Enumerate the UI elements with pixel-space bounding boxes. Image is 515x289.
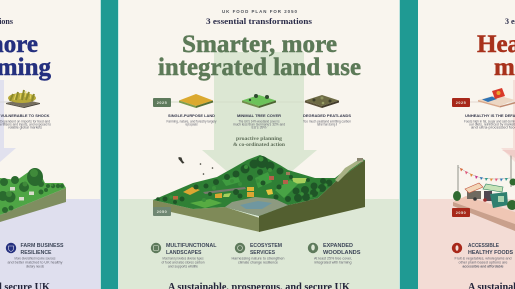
panel: left farming [0, 17, 66, 289]
subtitle: 3 essential transformations [206, 17, 312, 26]
text: resilience description: dietary needs [26, 264, 44, 268]
arrow: right panel [501, 80, 515, 162]
icon: degraded peatlands tile [305, 95, 339, 108]
column: degraded peatlands [303, 113, 351, 126]
lime meadows [190, 199, 222, 208]
right title [477, 31, 515, 81]
heading: multifunctional landscapes: LANDSCAPES [166, 250, 202, 256]
text: vulnerable description: volatile global markets [8, 126, 42, 130]
panel: centre land use [151, 9, 365, 289]
heading: farm business resilience [20, 243, 64, 256]
column: minimal tree cover: MINIMAL TREE COVER [237, 113, 281, 118]
pond and shore [225, 197, 288, 216]
top surface [153, 155, 365, 216]
icon: shield [6, 243, 16, 253]
column: degraded peatlands: DEGRADED PEATLANDS [303, 113, 351, 118]
text: ecosystem description: Harnessing nature to strengthen [232, 256, 285, 260]
icon: ecosystem services [235, 243, 245, 253]
illustration: 2050 integrated landscape [153, 155, 365, 232]
illustration: diversified farm landscape [0, 168, 66, 222]
column: minimal tree cover [233, 113, 285, 130]
right face [259, 160, 365, 232]
text: accessible description: accessible and affordable [462, 264, 504, 268]
buildings [173, 196, 178, 200]
heading: expanded woodlands: WOODLANDS [323, 250, 361, 256]
arrow: centre panel [202, 52, 317, 199]
text: multifunctional description: and supports wildlife [168, 264, 198, 268]
text: accessible description: other plant-based options are [458, 260, 508, 264]
text: proactive planning: & co-ordinated action [233, 142, 286, 148]
heading: vulnerable to shock: VULNERABLE TO SHOCK [0, 113, 50, 118]
trees mid [169, 156, 328, 202]
left title [0, 31, 51, 81]
icon: birds [178, 157, 213, 175]
text: resilience description [8, 256, 63, 268]
text: resilience description: and better matched to UK healthy [8, 260, 63, 264]
icon: minimal tree cover tile [242, 94, 276, 108]
heading: multifunctional landscapes: MULTIFUNCTIONAL [166, 243, 217, 249]
text: woodlands description: At least 25% tree cover, [314, 256, 352, 260]
left face [153, 200, 260, 232]
column: minimal tree cover: The UK's 14% woodland cover is [238, 120, 280, 124]
2050 badge: 2050 [456, 211, 466, 215]
heading: accessible healthy foods [468, 243, 513, 256]
text: multifunctional description [162, 256, 205, 268]
column: degraded peatlands: Too much peatland emitting carbon [303, 120, 351, 124]
2025 timeline [153, 98, 320, 107]
text: vulnerable description [0, 120, 51, 130]
road and fields [203, 187, 246, 194]
icon: expanded woodlands [308, 243, 318, 253]
text: vulnerable description: Dependent on imports for feed and [0, 120, 50, 124]
text: unhealthy description: and ultra-processed foods [471, 126, 515, 130]
text: unhealthy description [464, 120, 515, 130]
title: Smarter, more [182, 31, 337, 58]
icon: accessible foods [452, 243, 462, 253]
text: vulnerable description: fertilisers and inputs, and exposed to [0, 122, 51, 126]
text: woodlands description [314, 256, 352, 264]
icon: shopping tile with snack packet [478, 88, 515, 108]
2025 badge [452, 98, 515, 107]
icon: multifunctional landscapes [151, 243, 161, 253]
heading: expanded woodlands [323, 243, 361, 256]
illustration: food market [453, 150, 515, 231]
text: accessible description [454, 256, 512, 268]
heading: farm business resilience: RESILIENCE [20, 250, 52, 256]
column: single-purpose land: Farming, nature, and forestry largely [166, 120, 217, 124]
text: resilience description: More diversified income sources [14, 256, 56, 260]
text: ecosystem description [232, 256, 285, 264]
heading: expanded woodlands: EXPANDED [323, 243, 353, 249]
column: single-purpose land [166, 113, 217, 126]
text: ecosystem description: climate change resilience [238, 260, 278, 264]
column: minimal tree cover: much less than Germany's 32% and [233, 122, 285, 126]
text: woodlands description: integrated with farming [314, 260, 352, 264]
2025 timeline: 2025 [157, 101, 167, 105]
text: proactive planning [233, 136, 286, 148]
heading: accessible healthy foods: ACCESSIBLE [468, 243, 499, 249]
heading: accessible healthy foods: HEALTHY FOODS [468, 250, 513, 256]
heading: farm business resilience: FARM BUSINESS [20, 243, 64, 249]
pale upland [335, 160, 364, 182]
heading: ecosystem services [250, 243, 282, 256]
text: unhealthy description: our diets, reinforced by marketing [469, 122, 515, 126]
left 2025 line [0, 101, 10, 103]
column: single-purpose land: SINGLE-PURPOSE LAND [168, 113, 215, 118]
text: multifunctional description: Most land provides diverse types [162, 256, 204, 260]
heading: ecosystem services: ECOSYSTEM [250, 243, 282, 249]
title [158, 31, 361, 81]
column: degraded peatlands: rather than storing it [317, 122, 337, 126]
text: accessible description: Fruit & vegetables, wholegrains and [454, 256, 512, 260]
icon: single-purpose land tile [179, 94, 213, 108]
2025 badge: 2025 [456, 101, 466, 105]
2050 badge [153, 207, 171, 216]
icon: vulnerable crop tile [6, 90, 40, 108]
heading: multifunctional landscapes [166, 243, 217, 256]
trees dark [156, 156, 332, 204]
arrow: left panel [0, 80, 16, 162]
text: multifunctional description: of food and also stores carbon [162, 260, 205, 264]
column: single-purpose land: kept separated [186, 122, 198, 126]
2050 badge: 2050 [157, 210, 167, 214]
heading: ecosystem services: SERVICES [250, 250, 275, 256]
text: proactive planning: proactive planning [236, 136, 282, 142]
column: minimal tree cover: EU's 39% [252, 126, 267, 130]
panel: right healthy food [452, 17, 515, 289]
title: integrated land use [158, 54, 361, 81]
eyebrow: UK FOOD PLAN FOR 2050 [222, 9, 298, 14]
2050 badge [452, 208, 470, 217]
